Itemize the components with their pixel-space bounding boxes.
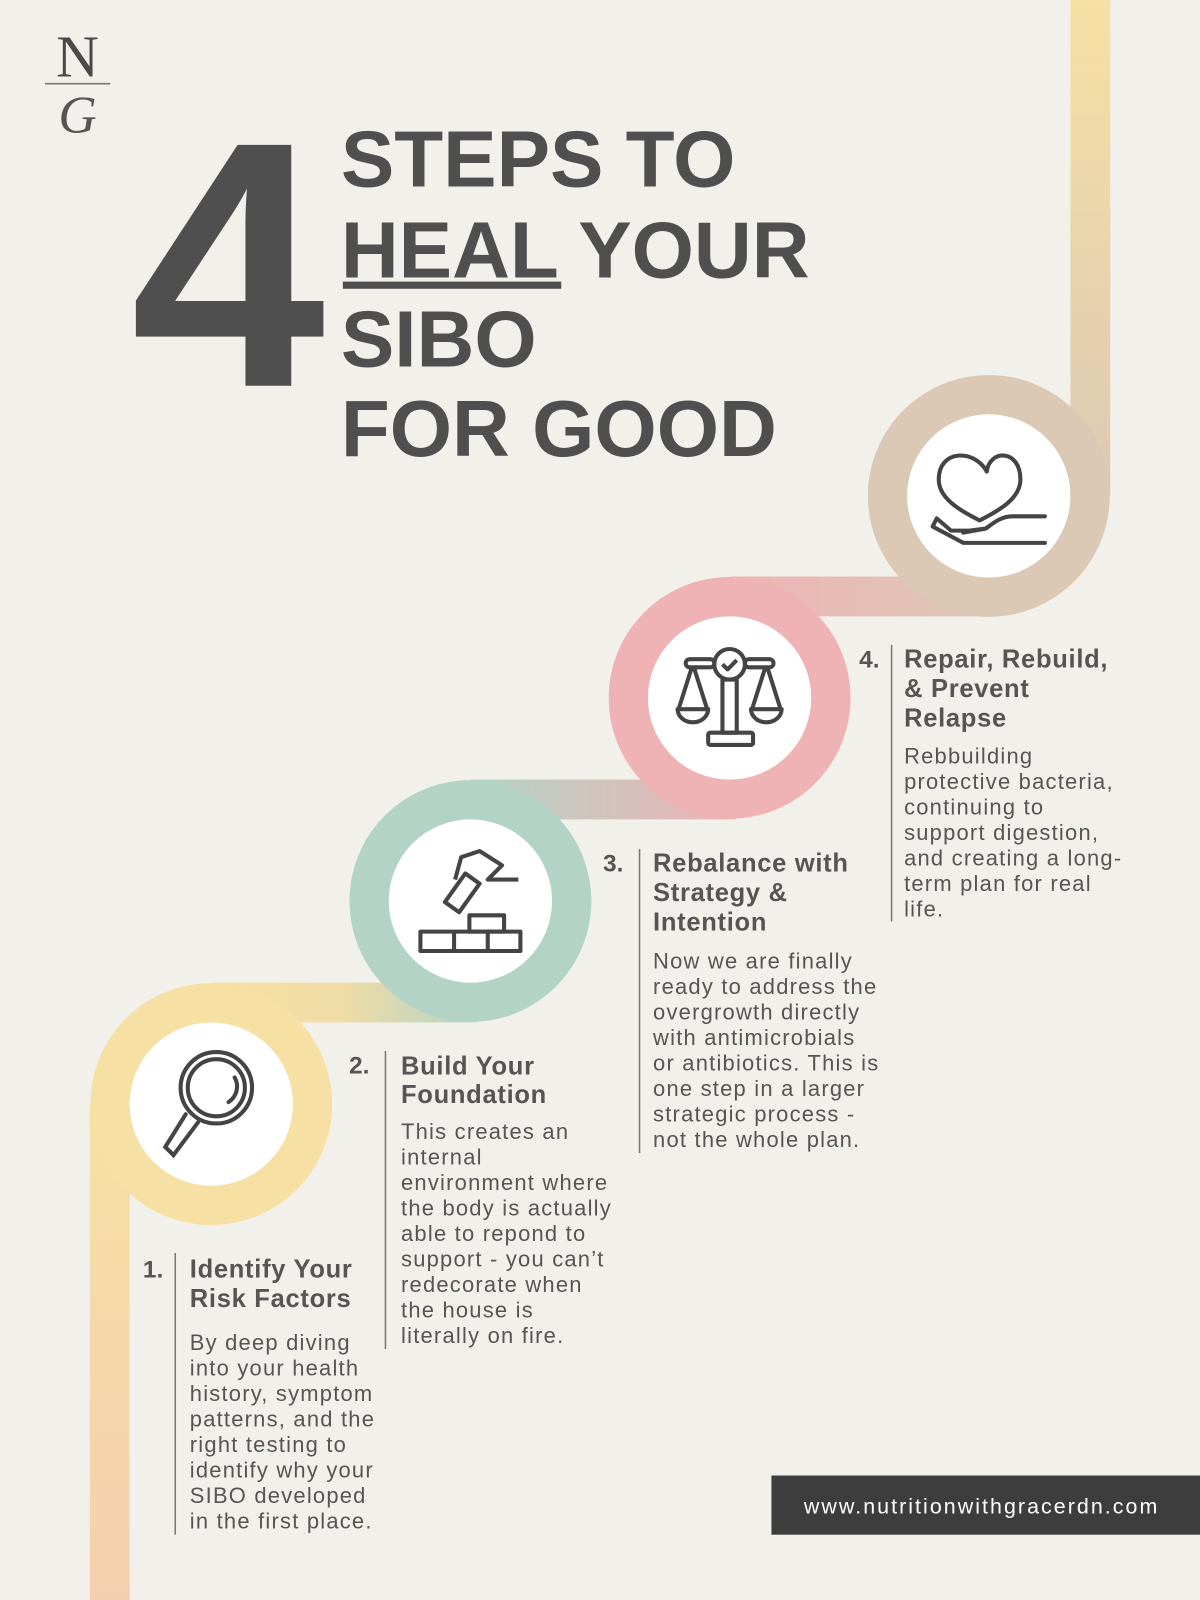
step 2 text: internal (401, 1144, 483, 1169)
step 2 text (349, 1051, 612, 1349)
step 4 text: Repair, Rebuild, (904, 645, 1108, 673)
title big number 4: 4 (131, 70, 327, 461)
step 3 text: one step in a larger (653, 1076, 865, 1101)
step 1 text: in the first place. (190, 1509, 373, 1534)
step 3 text (603, 849, 879, 1153)
step 2 text: support - you can’t (401, 1246, 605, 1271)
footer: website (771, 1476, 1200, 1535)
step 3 text: 3. (603, 850, 623, 877)
title: FOR GOOD (341, 383, 777, 473)
step 2 text: 2. (349, 1052, 369, 1079)
step 1 text: SIBO developed (190, 1483, 367, 1508)
icon: balance scale (678, 649, 782, 745)
step 4 text: protective bacteria, (904, 769, 1114, 794)
step 3 text: overgrowth directly (653, 999, 860, 1024)
step 4 text: Relapse (904, 705, 1007, 733)
step 4 text: term plan for real (904, 871, 1092, 896)
step 1 text: right testing to (190, 1432, 347, 1457)
logo: G (58, 87, 97, 145)
step 2 text: environment where (401, 1170, 608, 1195)
step 3 text: Strategy & (653, 879, 788, 907)
step 4 text: continuing to (904, 794, 1044, 819)
step 3 text: or antibiotics. This is (653, 1050, 879, 1075)
step 3 text: Rebalance with (653, 849, 849, 877)
step 4 text: and creating a long- (904, 845, 1122, 870)
title: SIBO (341, 293, 537, 383)
step 2 text: literally on fire. (401, 1323, 564, 1348)
step 2 text: able to repond to (401, 1221, 586, 1246)
icon: heart in hand (933, 455, 1045, 543)
step 3 text: Intention (653, 909, 767, 937)
step 3 text: not the whole plan. (653, 1127, 860, 1152)
step 4 text: & Prevent (904, 675, 1030, 703)
step 3 text: ready to address the (653, 974, 877, 999)
step 2 text: Build Your (401, 1052, 535, 1080)
step 1 text: Risk Factors (190, 1285, 351, 1313)
step 4 text: Rebbuilding (904, 743, 1033, 768)
step 4 text: 4. (859, 646, 880, 673)
step 4 text (859, 645, 1122, 921)
step 2 text: This creates an (401, 1119, 569, 1144)
logo: N (56, 24, 99, 90)
step 1 text: Identify Your (190, 1256, 353, 1284)
step 1 text: patterns, and the (190, 1407, 375, 1432)
step 1 text: By deep diving (190, 1330, 351, 1355)
step 1 text: identify why your (190, 1458, 374, 1483)
step 1 text: into your health (190, 1356, 359, 1381)
icon: hand with blocks (420, 851, 520, 951)
step 1 text: history, symptom (190, 1381, 373, 1406)
icon: magnifying glass (165, 1052, 252, 1155)
footer: website: www.nutritionwithgracerdn.com (803, 1494, 1159, 1518)
step 2 text: the house is (401, 1297, 534, 1322)
title (341, 114, 810, 473)
step 2 text: redecorate when (401, 1272, 583, 1297)
step 1 text: 1. (143, 1257, 163, 1284)
step 1 text (143, 1253, 375, 1535)
logo (45, 24, 110, 145)
step 3 text: Now we are finally (653, 948, 853, 973)
step 2 text: Foundation (401, 1081, 547, 1109)
step 3 text: strategic process - (653, 1101, 855, 1126)
step 3 text: with antimicrobials (652, 1025, 855, 1050)
step 4 text: life. (904, 896, 944, 921)
title: HEAL YOUR (341, 205, 810, 295)
title: STEPS TO (341, 114, 735, 204)
step 2 text: the body is actually (401, 1195, 612, 1220)
step 4 text: support digestion, (904, 820, 1099, 845)
